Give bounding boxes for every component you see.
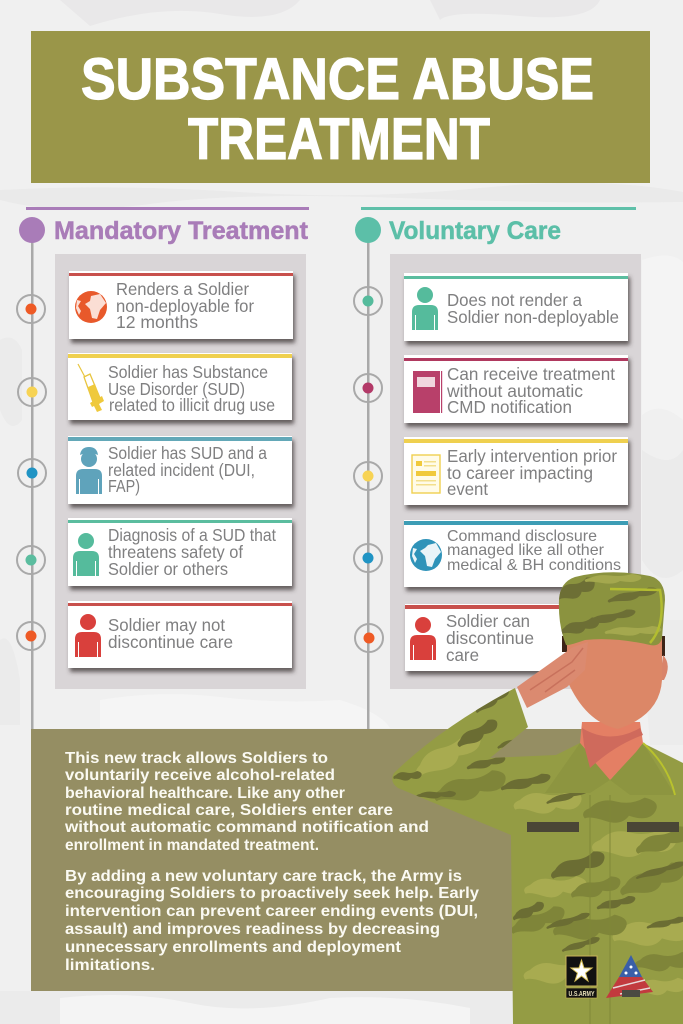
card: not non-deployable: Soldier non-deployable xyxy=(447,307,619,327)
timeline markers xyxy=(354,287,383,652)
icon: person green xyxy=(73,533,99,576)
title banner: SUBSTANCE ABUSE xyxy=(81,47,594,112)
panel: explanation text: assault) and improves readiness by decreasing xyxy=(65,921,440,938)
card: can discontinue: care xyxy=(446,645,479,665)
card: related incident: FAP) xyxy=(108,476,140,496)
panel: explanation text xyxy=(31,729,591,991)
icon: person red xyxy=(410,617,436,660)
title banner xyxy=(31,31,650,183)
logo: flag triangle xyxy=(606,955,653,998)
card: early intervention: to career impacting xyxy=(447,463,593,483)
panel: explanation text: limitations. xyxy=(65,957,155,974)
icon: syringe xyxy=(78,364,104,412)
card: no CMD notification: CMD notification xyxy=(447,397,572,417)
panel: voluntary care xyxy=(354,207,641,730)
timeline markers xyxy=(17,295,46,650)
card: safety diagnosis: threatens safety of xyxy=(108,542,243,562)
icon: person green xyxy=(412,287,438,330)
panel: explanation text: routine medical care, Soldiers enter care xyxy=(65,802,393,819)
card: no CMD notification: Can receive treatment xyxy=(447,364,615,384)
card: illicit drug use xyxy=(68,353,292,420)
card: may not discontinue xyxy=(68,601,292,668)
card: command disclosure: medical & BH conditions xyxy=(447,557,621,574)
card: illicit drug use: Use Disorder (SUD) xyxy=(108,379,245,399)
name tape bars xyxy=(527,822,679,832)
card: related incident: Soldier has SUD and a xyxy=(108,443,267,463)
panel: explanation text: intervention can prevent career ending events (DUI, xyxy=(65,903,478,920)
card: early intervention xyxy=(404,437,628,505)
panel: explanation text: behavioral healthcare. Like any other xyxy=(65,785,345,802)
logo: U.S. Army xyxy=(566,956,597,998)
logo: U.S. Army: U.S.ARMY xyxy=(568,991,595,998)
soldier collar xyxy=(545,728,675,795)
card: no CMD notification: without automatic xyxy=(446,381,583,401)
panel: explanation text: without automatic command notification and xyxy=(64,819,429,836)
icon: blue globe xyxy=(410,539,442,571)
icon: person red xyxy=(75,614,101,657)
card: can discontinue xyxy=(405,604,629,671)
card: can discontinue: Soldier can xyxy=(446,611,530,631)
card: may not discontinue: Soldier may not xyxy=(108,615,225,635)
card: command disclosure: managed like all other xyxy=(447,542,605,559)
panel: explanation text: voluntarily receive alcohol-related xyxy=(65,767,335,784)
soldier neck xyxy=(580,722,643,780)
icon: medic xyxy=(76,447,102,494)
card: early intervention: event xyxy=(447,479,488,499)
card: early intervention: Early intervention prior xyxy=(447,446,617,466)
heading: mandatory treatment: Mandatory Treatment xyxy=(54,217,309,245)
panel: explanation text: encouraging Soldiers to proactively seek help. Early xyxy=(65,885,479,902)
panel: mandatory treatment xyxy=(17,207,309,730)
icon: clipboard xyxy=(412,455,440,493)
soldier saluting hand xyxy=(517,642,588,708)
card: not non-deployable xyxy=(404,273,628,341)
card: related incident xyxy=(68,436,292,504)
icon: notebook xyxy=(413,371,442,413)
icon: globe xyxy=(75,291,107,323)
panel: explanation text: enrollment in mandated treatment. xyxy=(65,837,319,854)
card: command disclosure xyxy=(404,520,628,587)
title banner: TREATMENT xyxy=(188,107,490,172)
soldier cap xyxy=(558,572,665,646)
panel: explanation text: This new track allows Soldiers to xyxy=(65,750,328,767)
card: can discontinue: discontinue xyxy=(446,628,534,648)
heading: voluntary care: Voluntary Care xyxy=(389,217,561,245)
card: non-deployable xyxy=(69,271,293,339)
card: safety diagnosis xyxy=(68,518,292,586)
card: related incident: related incident (DUI, xyxy=(108,460,255,480)
card: safety diagnosis: Diagnosis of a SUD that xyxy=(108,525,276,545)
card: illicit drug use: Soldier has Substance xyxy=(108,362,268,382)
panel: explanation text: unnecessary enrollments and deployment xyxy=(65,939,402,956)
card: illicit drug use: related to illicit drug use xyxy=(109,395,275,415)
soldier uniform xyxy=(385,680,683,1024)
card: non-deployable: 12 months xyxy=(116,312,198,332)
illustration: saluting soldier xyxy=(385,568,683,1024)
card: non-deployable: non-deployable for xyxy=(116,296,254,316)
panel: explanation text: By adding a new voluntary care track, the Army is xyxy=(65,868,462,885)
card: may not discontinue: discontinue care xyxy=(108,632,233,652)
card: non-deployable: Renders a Soldier xyxy=(116,279,249,299)
card: safety diagnosis: Soldier or others xyxy=(108,559,228,579)
card: not non-deployable: Does not render a xyxy=(447,290,582,310)
soldier head xyxy=(562,636,668,729)
card: command disclosure: Command disclosure xyxy=(447,528,597,545)
card: no CMD notification xyxy=(404,355,628,423)
